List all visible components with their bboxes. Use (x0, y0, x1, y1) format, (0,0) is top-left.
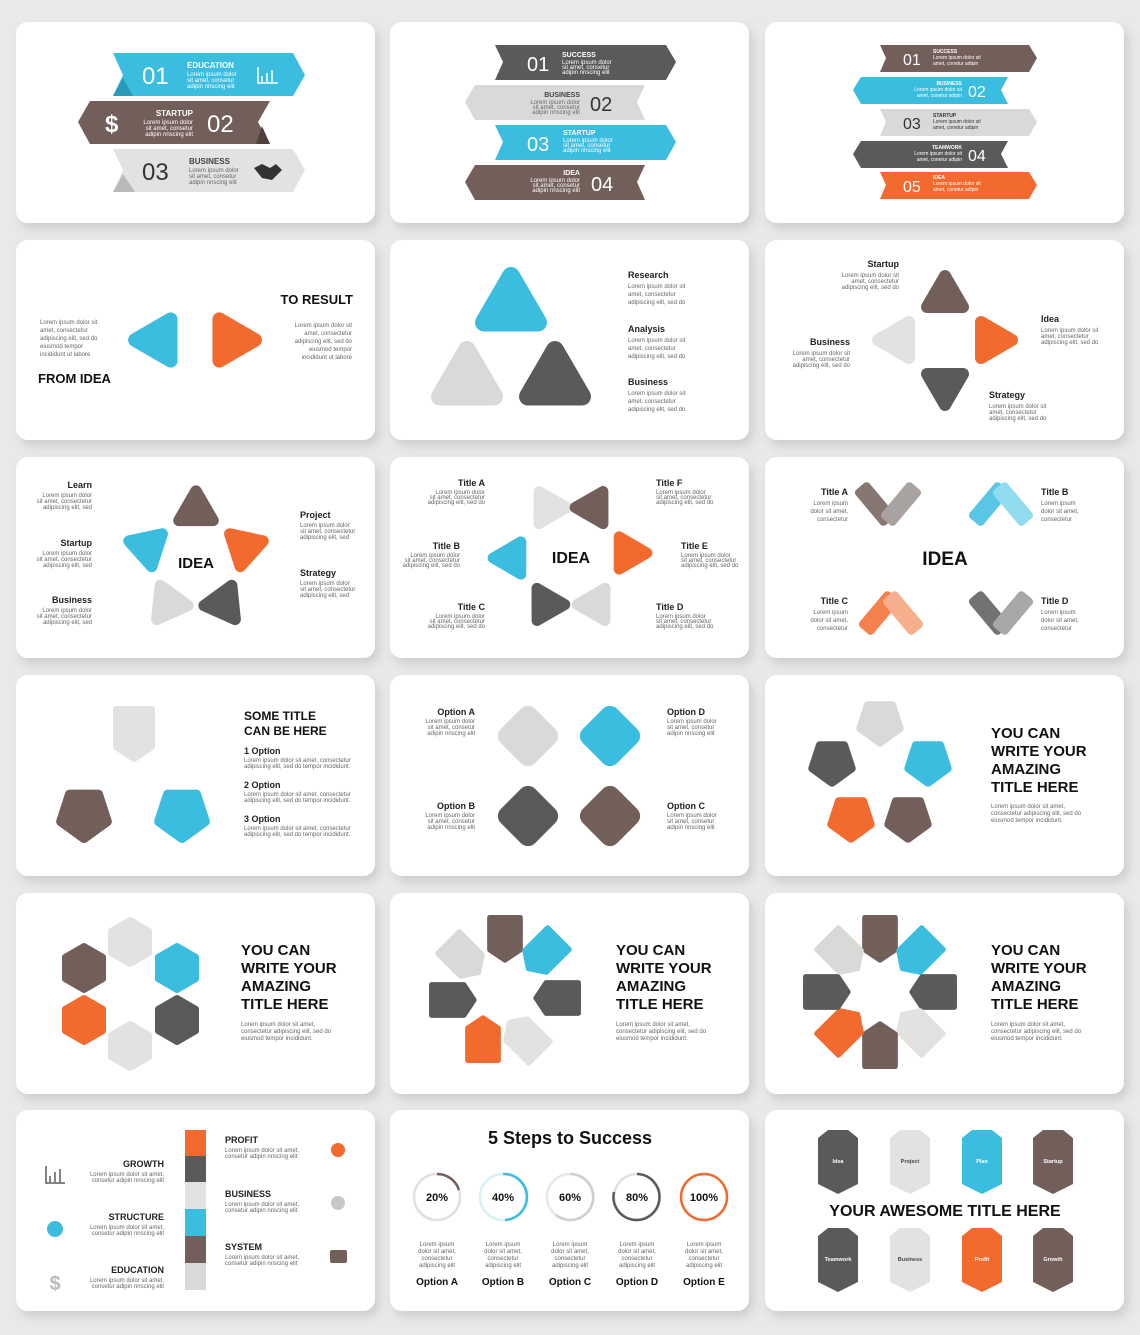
panel: five ribbons: amet, conetur adipin (933, 125, 979, 131)
panel: from idea to result: incididunt ut labore (302, 355, 353, 361)
panel: three ribbons: BUSINESS (189, 157, 231, 166)
panel: four diamonds options: Option C (667, 801, 705, 811)
panel: three pentagons options: Lorem ipsum dolor sit amet, consectetur (244, 826, 351, 832)
panel: 5 steps to success: dolor sit amet, (418, 1249, 456, 1255)
panel: five ribbons: BUSINESS (936, 81, 962, 87)
panel: eight pentagons ring A: YOU CAN (616, 942, 685, 959)
panel: idea pentagon triangles (37, 480, 355, 629)
panel: four ribbons: sit amet, consetur (533, 183, 580, 189)
panel: idea chevrons: dolor sit amet, (1041, 618, 1079, 624)
panel: four triangles: Startup (868, 259, 900, 269)
panel: idea pentagon triangles: sit amet, consectetur (300, 587, 355, 593)
panel: idea pentagon triangles: Lorem ipsum dolor (42, 493, 92, 499)
panel: from idea to result: eiusmod tempor (40, 344, 83, 350)
panel: 5 steps to success (414, 1128, 727, 1288)
panel: 5 steps to success: 100% (690, 1192, 718, 1204)
panel: four diamonds options: Lorem ipsum dolor (667, 719, 717, 725)
panel: awesome title badges: YOUR AWESOME TITLE HERE (829, 1203, 1061, 1220)
panel: vertical timeline: Lorem ipsum dolor sit amet, (225, 1148, 299, 1154)
panel: eight pentagons ring A: consectetur adipiscing elit, sed do (616, 1029, 707, 1035)
panel: idea pentagon triangles: Startup (60, 538, 93, 548)
panel: idea hexagon triangles: sit amet, consectetur (656, 495, 711, 501)
panel: idea pentagon triangles: adipiscing elit, sed (43, 563, 92, 569)
panel: 5 steps to success: dolor sit amet, (484, 1249, 522, 1255)
panel: idea hexagon triangles: sit amet, consectetur (430, 619, 485, 625)
panel: five ribbons: Lorem ipsum dolor sit (933, 181, 981, 187)
panel: from idea to result: FROM IDEA (38, 371, 112, 386)
panel: four ribbons: 04 (591, 174, 613, 196)
panel: vertical timeline: consetur adipin nnscing elit (225, 1208, 298, 1214)
panel: eight pentagons ring B: TITLE HERE (991, 996, 1079, 1013)
panel: idea chevrons: Title D (1041, 596, 1069, 606)
panel: four triangles: Lorem ipsum dolor sit (1041, 328, 1098, 334)
panel: vertical timeline: Lorem ipsum dolor sit amet, (225, 1202, 299, 1208)
panel: idea hexagon triangles: Lorem ipsum dolor (681, 553, 731, 559)
panel: three triangles: Research (628, 270, 669, 280)
panel: eight pentagons ring B: AMAZING (991, 978, 1061, 995)
panel: three ribbons: adipin nnscing elit (189, 180, 237, 186)
panel: four triangles: adipiscing elit, sed do (1041, 340, 1099, 346)
panel: four diamonds options: sit amet, consetur (428, 725, 475, 731)
panel: three pentagons options: Lorem ipsum dolor sit amet, consectetur (244, 758, 351, 764)
panel: from idea to result: amet, consectetur (40, 328, 88, 334)
panel: vertical timeline: consetur adipin nnscing elit (92, 1284, 164, 1290)
panel: three ribbons: adipin nnscing elit (145, 132, 193, 138)
panel: idea chevrons: dolor sit amet, (1041, 509, 1079, 515)
panel: idea hexagon triangles: sit amet, consectetur (405, 558, 460, 564)
panel: vertical timeline: consetur adipin nnscing elit (92, 1178, 164, 1184)
panel: eight pentagons ring A: TITLE HERE (616, 996, 704, 1013)
panel: three triangles: amet, consectetur (628, 292, 676, 298)
panel: from idea to result (38, 292, 353, 386)
panel: eight pentagons ring B: Lorem ipsum dolor sit amet, (991, 1022, 1065, 1028)
panel: idea hexagon triangles: Title D (656, 602, 684, 612)
panel: idea hexagon triangles: IDEA (552, 550, 591, 567)
panel: awesome title badges: Idea (832, 1159, 844, 1165)
panel: 5 steps to success: adipiscing elit (485, 1263, 521, 1269)
panel: three ribbons: EDUCATION (187, 61, 234, 70)
panel: three pentagons options (51, 709, 351, 843)
panel: three triangles (440, 270, 686, 413)
panel: idea pentagon triangles: sit amet, consectetur (37, 557, 92, 563)
panel: four triangles: Strategy (989, 390, 1025, 400)
panel: four triangles: adipiscing elit, sed do (793, 363, 851, 369)
panel: vertical timeline: Lorem ipsum dolor sit amet, (90, 1278, 164, 1284)
panel: idea chevrons: Lorem ipsum (813, 501, 848, 507)
panel: four diamonds options (425, 702, 717, 850)
panel: five ribbons: amet, conetur adipin (933, 61, 979, 67)
panel: eight pentagons ring B: WRITE YOUR (991, 960, 1087, 977)
panel: four triangles: Lorem ipsum dolor sit (989, 404, 1046, 410)
panel: four diamonds options: adipin nnscing elit (427, 731, 475, 737)
panel: from idea to result: adipiscing elit, sed do (295, 339, 353, 345)
panel: eight pentagons ring A (432, 918, 712, 1063)
panel: 5 steps to success: Option B (482, 1277, 524, 1288)
panel: idea chevrons: Lorem ipsum (1041, 610, 1076, 616)
panel: idea pentagon triangles: sit amet, consectetur (300, 529, 355, 535)
panel: idea pentagon triangles: adipiscing elit, sed (300, 535, 349, 541)
panel: 5 steps to success: consectetur (688, 1256, 720, 1262)
panel: 5 steps to success: 40% (492, 1192, 514, 1204)
panel: three triangles: Lorem ipsum dolor sit (628, 391, 685, 397)
panel: five ribbons: 01 (903, 52, 921, 69)
panel: awesome title badges (818, 1130, 1073, 1292)
panel: four ribbons: 01 (527, 54, 549, 76)
panel: 5 steps to success: Option E (683, 1277, 725, 1288)
panel: 5 steps to success: adipiscing elit (686, 1263, 722, 1269)
panel: three triangles: amet, consectetur (628, 399, 676, 405)
panel: three pentagons options: 3 Option (244, 814, 280, 824)
panel: three triangles: Business (628, 377, 668, 387)
panel: idea pentagon triangles: Project (300, 510, 331, 520)
panel: three triangles: Lorem ipsum dolor sit (628, 284, 685, 290)
panel: five pentagons ring: AMAZING (991, 761, 1061, 778)
panel: four diamonds options: adipin nnscing elit (667, 731, 715, 737)
panel: five ribbons: 03 (903, 116, 921, 133)
panel: five pentagons ring: WRITE YOUR (991, 743, 1087, 760)
panel: five ribbons: Lorem ipsum dolor sit (933, 119, 981, 125)
panel: vertical timeline: GROWTH (123, 1159, 164, 1169)
panel: idea chevrons: dolor sit amet, (810, 509, 848, 515)
panel: four ribbons: sit amet, consetur (533, 105, 580, 111)
panel: idea hexagon triangles: sit amet, consectetur (656, 619, 711, 625)
panel: four diamonds options: Option A (437, 707, 475, 717)
panel: three triangles: adipiscing elit, sed do (628, 300, 686, 306)
panel: 5 steps to success: 5 Steps to Success (488, 1128, 652, 1148)
panel: idea pentagon triangles: adipiscing elit, sed (43, 620, 92, 626)
panel: four ribbons: adipin nnscing elit (532, 110, 580, 116)
panel: five ribbons: amet, conetur adipin (917, 93, 962, 99)
panel: four triangles: Business (810, 337, 850, 347)
panel: three ribbons: 01 (142, 63, 169, 90)
panel: idea chevrons (810, 481, 1079, 636)
panel: five ribbons: Lorem ipsum dolor sit (933, 55, 981, 61)
panel: from idea to result: TO RESULT (281, 292, 353, 307)
panel: idea hexagon triangles: Lorem ipsum dolor (656, 490, 706, 496)
panel: six hexagons ring: consectetur adipiscing elit, sed do (241, 1029, 332, 1035)
panel: four ribbons: Lorem ipsum dolor (563, 138, 613, 144)
panel: 5 steps to success: consectetur (621, 1256, 653, 1262)
panel: idea hexagon triangles (403, 478, 739, 630)
panel: three ribbons: sit amet, consetur (187, 78, 234, 84)
panel: idea chevrons: dolor sit amet, (810, 618, 848, 624)
panel: idea chevrons: Title A (821, 487, 848, 497)
panel: 5 steps to success: Lorem ipsum (420, 1242, 454, 1248)
panel: eight pentagons ring B: YOU CAN (991, 942, 1060, 959)
panel: idea pentagon triangles: adipiscing elit, sed (43, 505, 92, 511)
panel: five pentagons ring: Lorem ipsum dolor sit amet, (991, 804, 1065, 810)
panel: idea hexagon triangles: Title A (458, 478, 485, 488)
panel: three triangles: amet, consectetur (628, 346, 676, 352)
panel: idea chevrons: Title C (821, 596, 848, 606)
panel: 5 steps to success: consectetur (421, 1256, 453, 1262)
panel: five ribbons: IDEA (933, 175, 945, 181)
panel: awesome title badges: Business (898, 1257, 922, 1263)
panel: vertical timeline: $ (49, 1273, 61, 1295)
panel: three ribbons: Lorem ipsum dolor (143, 120, 193, 126)
panel: idea pentagon triangles: sit amet, consectetur (37, 614, 92, 620)
panel: four ribbons: adipin nnscing elit (562, 70, 610, 76)
panel: from idea to result: adipiscing elit, sed do (40, 336, 98, 342)
panel: awesome title badges: Startup (1043, 1159, 1063, 1165)
panel: 5 steps to success: Lorem ipsum (687, 1242, 721, 1248)
panel: awesome title badges: Growth (1043, 1257, 1063, 1263)
panel: four triangles: Lorem ipsum dolor sit (793, 351, 850, 357)
panel: vertical timeline: PROFIT (225, 1135, 259, 1145)
panel: four diamonds options: sit amet, consetur (667, 725, 714, 731)
panel: three triangles: Analysis (628, 324, 665, 334)
panel: three ribbons: 02 (207, 111, 234, 138)
panel: four diamonds options: Option D (667, 707, 705, 717)
panel: awesome title badges: Project (901, 1159, 919, 1165)
panel: four ribbons: adipin nnscing elit (532, 188, 580, 194)
panel: five ribbons: Lorem ipsum dolor sit (914, 87, 963, 93)
panel: vertical timeline: BUSINESS (225, 1189, 271, 1199)
panel: four ribbons: BUSINESS (544, 92, 580, 99)
panel: eight pentagons ring A: Lorem ipsum dolor sit amet, (616, 1022, 690, 1028)
panel: four diamonds options: adipin nnscing elit (427, 825, 475, 831)
panel: eight pentagons ring A: eiusmod tempor incididunt. (616, 1036, 688, 1042)
panel: six hexagons ring: TITLE HERE (241, 996, 329, 1013)
panel: three triangles: adipiscing elit, sed do (628, 354, 686, 360)
panel: idea pentagon triangles: sit amet, consectetur (37, 499, 92, 505)
panel: 5 steps to success: Option D (616, 1277, 658, 1288)
panel: six hexagons ring: AMAZING (241, 978, 311, 995)
panel: vertical timeline: STRUCTURE (108, 1212, 164, 1222)
panel: five pentagons ring: TITLE HERE (991, 779, 1079, 796)
panel: five ribbons (853, 45, 1037, 199)
panel: three pentagons options: 1 Option (244, 746, 280, 756)
panel: five ribbons: 05 (903, 179, 921, 196)
panel: three pentagons options: SOME TITLE (244, 709, 316, 723)
panel: four diamonds options: Option B (437, 801, 475, 811)
panel: 5 steps to success: Lorem ipsum (620, 1242, 654, 1248)
panel: five ribbons: SUCCESS (933, 49, 957, 55)
panel: from idea to result: incididunt ut labore (40, 352, 91, 358)
panel: 5 steps to success: Option A (416, 1277, 458, 1288)
panel: idea hexagon triangles: Title B (433, 541, 460, 551)
panel: eight pentagons ring B (806, 918, 1087, 1066)
panel: four diamonds options: Lorem ipsum dolor (425, 813, 475, 819)
panel: four ribbons: 02 (590, 94, 612, 116)
panel: idea chevrons: consectetur (1041, 626, 1072, 632)
panel: idea chevrons: IDEA (922, 549, 968, 570)
panel: four triangles: Lorem ipsum dolor sit (842, 273, 899, 279)
panel: three ribbons: sit amet, consetur (146, 126, 193, 132)
panel: idea hexagon triangles: sit amet, consectetur (681, 558, 736, 564)
panel: 5 steps to success: consectetur (487, 1256, 519, 1262)
panel: five ribbons: 04 (968, 148, 986, 165)
panel: awesome title badges: Plan (976, 1159, 988, 1165)
panel: vertical timeline: EDUCATION (111, 1265, 164, 1275)
panel: idea hexagon triangles: adipiscing elit, sed do (428, 500, 486, 506)
panel: from idea to result: amet, consectetur (304, 331, 352, 337)
panel: five pentagons ring: eiusmod tempor incididunt. (991, 818, 1063, 824)
panel: 5 steps to success: 20% (426, 1192, 448, 1204)
panel: four ribbons: sit amet, consetur (563, 143, 610, 149)
panel: four ribbons: adipin nnscing elit (563, 148, 611, 154)
panel: idea hexagon triangles: Lorem ipsum dolor (656, 614, 706, 620)
panel: six hexagons ring: Lorem ipsum dolor sit amet, (241, 1022, 315, 1028)
panel: vertical timeline: Lorem ipsum dolor sit amet, (90, 1225, 164, 1231)
panel: from idea to result: Lorem ipsum dolor sit (295, 323, 352, 329)
panel: three pentagons options: adipiscing elit, sed do tempor incididunt. (244, 764, 351, 770)
panel: three pentagons options: Lorem ipsum dolor sit amet, consectetur (244, 792, 351, 798)
panel: four diamonds options: sit amet, consetur (667, 819, 714, 825)
panel: three ribbons: $ (105, 111, 119, 138)
panel: four ribbons: Lorem ipsum dolor (530, 178, 580, 184)
panel: idea pentagon triangles: Lorem ipsum dolor (42, 551, 92, 557)
panel: idea hexagon triangles: adipiscing elit, sed do (656, 624, 714, 630)
panel: five pentagons ring: YOU CAN (991, 725, 1060, 742)
panel: 5 steps to success: 80% (626, 1192, 648, 1204)
panel: three ribbons: Lorem ipsum dolor (187, 72, 237, 78)
panel: idea pentagon triangles: IDEA (178, 555, 214, 572)
panel: four diamonds options: Lorem ipsum dolor (667, 813, 717, 819)
panel: four triangles: amet, consectetur (851, 279, 899, 285)
panel: four triangles: amet, consectetur (1041, 334, 1089, 340)
panel: four triangles (793, 259, 1099, 422)
panel: five ribbons: amet, conetur adipin (917, 157, 962, 163)
panel: vertical timeline: consetur adipin nnscing elit (225, 1154, 298, 1160)
panel: 5 steps to success: Lorem ipsum (486, 1242, 520, 1248)
panel: idea hexagon triangles: Lorem ipsum dolor (435, 490, 485, 496)
panel: eight pentagons ring A: AMAZING (616, 978, 686, 995)
panel: four ribbons: Lorem ipsum dolor (562, 60, 612, 66)
panel: six hexagons ring: YOU CAN (241, 942, 310, 959)
panel: five ribbons: amet, conetur adipin (933, 187, 979, 193)
panel: three pentagons options: 2 Option (244, 780, 280, 790)
panel: eight pentagons ring B: eiusmod tempor incididunt. (991, 1036, 1063, 1042)
panel: six hexagons ring: WRITE YOUR (241, 960, 337, 977)
panel: five ribbons: 02 (968, 84, 986, 101)
panel: three ribbons: sit amet, consetur (189, 174, 236, 180)
panel: 5 steps to success: dolor sit amet, (685, 1249, 723, 1255)
panel: idea chevrons: consectetur (817, 517, 848, 523)
panel: 5 steps to success: Option C (549, 1277, 591, 1288)
panel: eight pentagons ring A: WRITE YOUR (616, 960, 712, 977)
panel: vertical timeline (46, 1130, 347, 1295)
panel: vertical timeline: SYSTEM (225, 1242, 262, 1252)
panel: four ribbons: Lorem ipsum dolor (530, 100, 580, 106)
panel: 5 steps to success: 60% (559, 1192, 581, 1204)
panel: five ribbons: Lorem ipsum dolor sit (914, 151, 963, 157)
panel: idea hexagon triangles: Title C (458, 602, 485, 612)
panel: three ribbons: Lorem ipsum dolor (189, 168, 239, 174)
panel: four ribbons: SUCCESS (562, 52, 596, 59)
panel: four diamonds options: adipin nnscing elit (667, 825, 715, 831)
panel: vertical timeline: consetur adipin nnscing elit (225, 1261, 298, 1267)
panel: 5 steps to success: dolor sit amet, (551, 1249, 589, 1255)
panel: four triangles: adipiscing elit, sed do (989, 416, 1047, 422)
panel: 5 steps to success: adipiscing elit (552, 1263, 588, 1269)
panel: three ribbons: 03 (142, 159, 169, 186)
panel: idea chevrons: Lorem ipsum (813, 610, 848, 616)
panel: from idea to result: eiusmod tempor (309, 347, 352, 353)
panel: idea pentagon triangles: Business (52, 595, 92, 605)
panel: four diamonds options: Lorem ipsum dolor (425, 719, 475, 725)
panel: three ribbons (78, 53, 305, 192)
panel: idea pentagon triangles: Lorem ipsum dolor (300, 523, 350, 529)
panel: idea pentagon triangles: Lorem ipsum dolor (300, 581, 350, 587)
panel: four ribbons: sit amet, consetur (562, 65, 609, 71)
panel: three pentagons options: adipiscing elit, sed do tempor incididunt. (244, 832, 351, 838)
panel: idea chevrons: Title B (1041, 487, 1069, 497)
panel: idea pentagon triangles: adipiscing elit, sed (300, 593, 349, 599)
panel: four triangles: Idea (1041, 314, 1060, 324)
panel: idea chevrons: consectetur (817, 626, 848, 632)
panel: three triangles: Lorem ipsum dolor sit (628, 338, 685, 344)
panel: three ribbons: STARTUP (156, 109, 194, 118)
panel: five pentagons ring: consectetur adipiscing elit, sed do (991, 811, 1082, 817)
panel: four triangles: amet, consectetur (802, 357, 850, 363)
panel: idea hexagon triangles: sit amet, consectetur (430, 495, 485, 501)
panel: idea hexagon triangles: adipiscing elit, sed do (403, 563, 461, 569)
panel: four triangles: adipiscing elit, sed do (842, 285, 900, 291)
panel: 5 steps to success: adipiscing elit (619, 1263, 655, 1269)
panel: three pentagons options: CAN BE HERE (244, 724, 327, 738)
panel: idea hexagon triangles: Title F (656, 478, 683, 488)
panel: 5 steps to success: Lorem ipsum (553, 1242, 587, 1248)
panel: five ribbons: STARTUP (933, 113, 956, 119)
panel: idea hexagon triangles: Lorem ipsum dolor (435, 614, 485, 620)
panel: 5 steps to success: consectetur (554, 1256, 586, 1262)
panel: four ribbons: IDEA (563, 170, 580, 177)
panel: three triangles: adipiscing elit, sed do (628, 407, 686, 413)
panel: four ribbons: 03 (527, 134, 549, 156)
panel: six hexagons ring: eiusmod tempor incididunt. (241, 1036, 313, 1042)
panel: five ribbons: TEAMWORK (932, 145, 962, 151)
panel: four triangles: amet, consectetur (989, 410, 1037, 416)
panel: four ribbons (465, 45, 676, 200)
panel: awesome title badges: Teamwork (825, 1257, 852, 1263)
panel: from idea to result: Lorem ipsum dolor sit (40, 320, 97, 326)
panel: 5 steps to success: adipiscing elit (419, 1263, 455, 1269)
panel: 5 steps to success: dolor sit amet, (618, 1249, 656, 1255)
panel: idea hexagon triangles: adipiscing elit, sed do (656, 500, 714, 506)
panel: idea hexagon triangles: adipiscing elit, sed do (681, 563, 739, 569)
panel: four diamonds options: sit amet, consetur (428, 819, 475, 825)
panel: six hexagons ring (65, 920, 337, 1068)
panel: idea hexagon triangles: adipiscing elit, sed do (428, 624, 486, 630)
panel: four ribbons: STARTUP (563, 130, 596, 137)
panel: vertical timeline: Lorem ipsum dolor sit amet, (225, 1255, 299, 1261)
panel: vertical timeline: Lorem ipsum dolor sit amet, (90, 1172, 164, 1178)
panel: idea hexagon triangles: Lorem ipsum dolor (410, 553, 460, 559)
panel: vertical timeline: consetur adipin nnscing elit (92, 1231, 164, 1237)
panel: idea pentagon triangles: Learn (67, 480, 92, 490)
panel: three ribbons: adipin nnscing elit (187, 84, 235, 90)
panel: idea chevrons: Lorem ipsum (1041, 501, 1076, 507)
panel: idea hexagon triangles: Title E (681, 541, 708, 551)
panel: awesome title badges: Profit (975, 1257, 989, 1263)
panel: eight pentagons ring B: consectetur adipiscing elit, sed do (991, 1029, 1082, 1035)
panel: idea pentagon triangles: Lorem ipsum dolor (42, 608, 92, 614)
panel: three pentagons options: adipiscing elit, sed do tempor incididunt. (244, 798, 351, 804)
panel: idea chevrons: consectetur (1041, 517, 1072, 523)
panel: idea pentagon triangles: Strategy (300, 568, 336, 578)
panel: five pentagons ring (810, 706, 1087, 843)
